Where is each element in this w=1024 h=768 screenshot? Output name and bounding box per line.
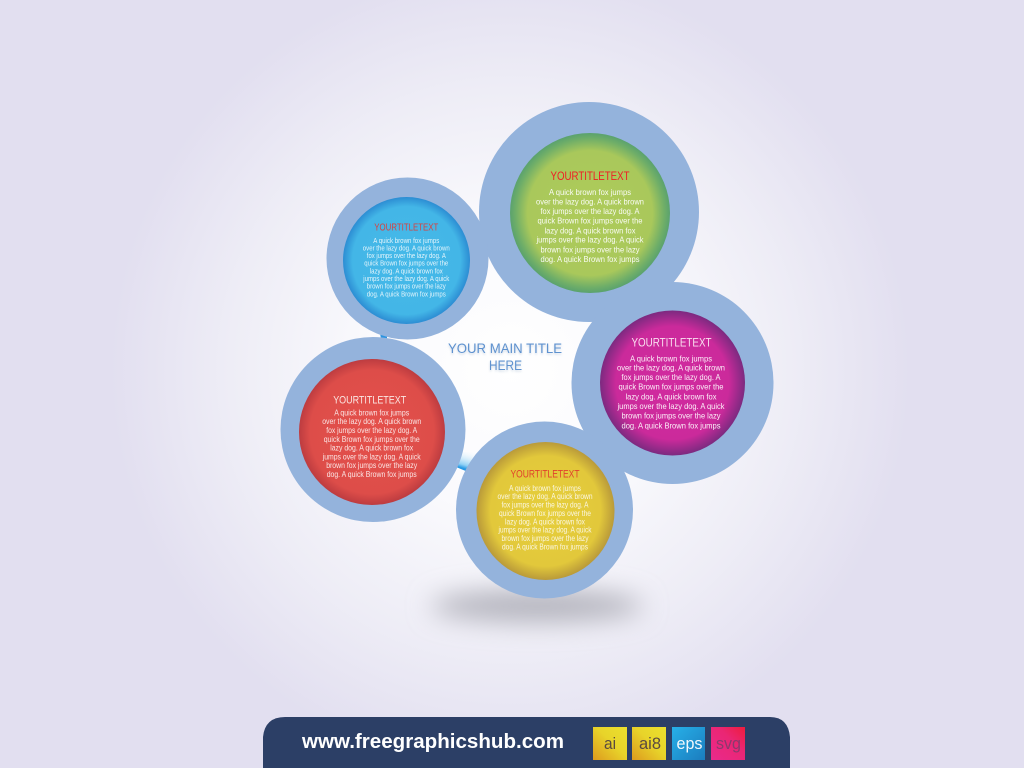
panel: yellow circle (476, 442, 614, 580)
badge: eps: eps (676, 734, 702, 753)
panel: blue circle: fox jumps over the lazy dog. A (367, 251, 447, 260)
panel: green circle (510, 133, 670, 293)
panel: magenta circle: quick Brown fox jumps over the (618, 382, 724, 392)
panel: red circle: quick Brown fox jumps over the (324, 435, 420, 444)
panel: magenta circle: YOURTITLETEXT (632, 336, 712, 350)
panel: blue circle: A quick brown fox jumps (373, 236, 439, 245)
panel: blue circle: quick Brown fox jumps over the (364, 259, 448, 268)
panel: yellow circle: quick Brown fox jumps over the (499, 509, 591, 518)
panel: red circle (299, 359, 445, 505)
panel: red circle: A quick brown fox jumps (334, 409, 409, 418)
panel: red circle: lazy dog. A quick brown fox (330, 444, 413, 453)
panel: green circle: jumps over the lazy dog. A quick (536, 235, 644, 245)
panel: magenta circle (600, 310, 745, 456)
footer bar (263, 717, 790, 768)
panel: red circle: fox jumps over the lazy dog. A (326, 426, 418, 435)
panel: red circle: YOURTITLETEXT (333, 394, 406, 406)
ground shadow (431, 590, 643, 622)
badge: ai (593, 727, 627, 760)
badge: eps (672, 727, 705, 760)
panel: green circle: quick Brown fox jumps over the (538, 216, 643, 226)
panel: red circle: jumps over the lazy dog. A quick (322, 453, 422, 462)
panel: magenta circle: jumps over the lazy dog. A quick (617, 401, 725, 411)
panel: green circle: YOURTITLETEXT (550, 169, 630, 183)
panel: magenta circle: fox jumps over the lazy dog. A (622, 372, 721, 382)
main title (448, 340, 562, 373)
panel: magenta circle: brown fox jumps over the lazy (622, 411, 721, 421)
panel: yellow circle: fox jumps over the lazy dog. A (502, 500, 589, 509)
panel: outer ring cluster (280, 102, 774, 598)
main title: HERE (489, 357, 522, 373)
footer url: www.freegraphicshub.com (301, 731, 564, 753)
panel: green circle: fox jumps over the lazy dog. A (540, 206, 640, 216)
main title: YOUR MAIN TITLE (448, 340, 562, 356)
panel: magenta circle: A quick brown fox jumps (630, 353, 712, 363)
panel: magenta circle: lazy dog. A quick brown fox (626, 391, 717, 401)
panel: magenta circle: over the lazy dog. A quick brown (617, 363, 725, 373)
badge: ai8 (632, 727, 666, 760)
panel: blue circle: jumps over the lazy dog. A quick (363, 274, 449, 283)
panel: yellow circle: dog. A quick Brown fox jumps (502, 542, 588, 551)
panel: green circle: dog. A quick Brown fox jumps (540, 254, 640, 264)
panel: yellow circle: brown fox jumps over the lazy (502, 534, 588, 543)
panel: blue circle: dog. A quick Brown fox jumps (367, 289, 446, 298)
panel: green circle: A quick brown fox jumps (549, 187, 631, 197)
panel: green circle: over the lazy dog. A quick brown (536, 197, 644, 207)
panel: blue circle: brown fox jumps over the lazy (367, 282, 446, 291)
panel: yellow circle: over the lazy dog. A quick brown (498, 492, 592, 501)
panel: yellow circle: jumps over the lazy dog. A quick (498, 526, 592, 535)
panel: blue circle: YOURTITLETEXT (374, 222, 438, 234)
panel: green circle: brown fox jumps over the lazy (540, 244, 640, 254)
badge: svg (711, 727, 745, 760)
badge: svg: svg (716, 734, 741, 753)
panel: yellow circle: lazy dog. A quick brown fox (505, 517, 585, 526)
panel: yellow circle: A quick brown fox jumps (509, 484, 581, 493)
panel: blue circle: over the lazy dog. A quick brown (363, 244, 450, 253)
badge: ai: ai (604, 734, 616, 753)
panel: blue circle (343, 197, 470, 324)
panel: blue circle: lazy dog. A quick brown fox (370, 266, 443, 275)
panel: red circle: dog. A quick Brown fox jumps (327, 470, 417, 479)
badge: ai8: ai8 (639, 734, 661, 753)
panel: magenta circle: dog. A quick Brown fox jumps (622, 420, 720, 430)
panel: yellow circle: YOURTITLETEXT (510, 468, 580, 480)
panel: red circle: brown fox jumps over the lazy (326, 461, 417, 470)
panel: green circle: lazy dog. A quick brown fox (544, 225, 636, 235)
connector: blue ring glints (380, 333, 478, 474)
panel: red circle: over the lazy dog. A quick brown (322, 417, 421, 426)
